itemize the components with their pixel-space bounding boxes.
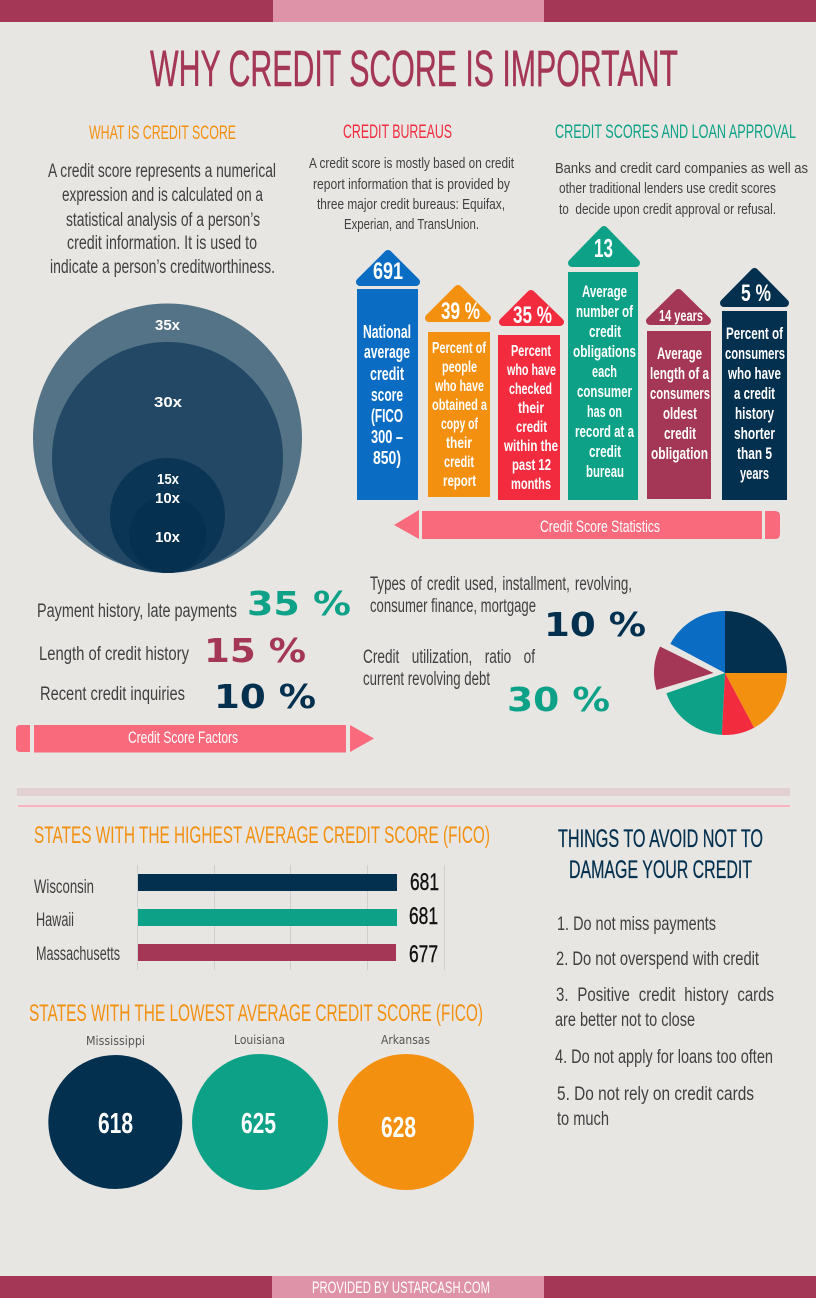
chart: nested circles: 10x xyxy=(155,529,181,546)
statistic: national average credit score: (FICO xyxy=(371,406,403,426)
statistic: credit history shorter than 5 years: shorter xyxy=(734,424,775,443)
statistic: obtained credit report: report xyxy=(443,473,476,490)
statistic: average credit obligations: each xyxy=(592,362,617,381)
statistic: length of oldest obligation: obligation xyxy=(651,444,708,463)
statistic: credit history shorter than 5 years: years xyxy=(740,464,769,483)
arrow banner: credit score factors: Credit Score Factors xyxy=(128,728,238,747)
factor: credit utilization: 30 % xyxy=(507,680,610,719)
statistic: national average credit score: score xyxy=(371,385,403,405)
bar chart: highest average credit scores: Wisconsin xyxy=(34,877,94,898)
statistic: length of oldest obligation: consumers xyxy=(650,384,710,403)
statistic: credit history shorter than 5 years: than 5 xyxy=(737,444,772,463)
statistic: national average credit score xyxy=(357,254,418,500)
circle stat: Mississippi: Mississippi xyxy=(86,1034,145,1048)
statistic: national average credit score: 300 – xyxy=(371,427,403,447)
statistic: checked credit: within the xyxy=(503,438,558,455)
factor: recent credit inquiries: Recent credit inquiries xyxy=(40,684,185,705)
statistic: obtained credit report xyxy=(428,289,490,497)
chart: nested circles: 35x xyxy=(155,317,181,334)
text block: credit score definition: indicate a person’s creditworthiness. xyxy=(50,257,275,278)
factor: types of credit used: consumer finance, mortgage xyxy=(370,596,536,617)
factor: recent credit inquiries: 10 % xyxy=(214,677,316,716)
factor: credit utilization xyxy=(363,647,610,719)
statistic: credit history shorter than 5 years: Percent of xyxy=(726,324,783,343)
statistic: average credit obligations: record at a xyxy=(575,422,634,441)
statistic: credit history shorter than 5 years: 5 % xyxy=(741,280,771,307)
statistic: credit history shorter than 5 years: history xyxy=(735,404,774,423)
circle stat: Mississippi xyxy=(48,1034,182,1189)
statistic: length of oldest obligation: credit xyxy=(664,424,696,443)
circle stat: Louisiana: 625 xyxy=(241,1108,276,1140)
statistic: credit history shorter than 5 years: who have xyxy=(727,364,781,383)
bar chart: highest average credit scores: Hawaii xyxy=(36,910,74,931)
statistic: average credit obligations: 13 xyxy=(594,233,613,263)
heading: what is credit score: WHAT IS CREDIT SCORE xyxy=(89,123,236,144)
statistic: average credit obligations xyxy=(568,230,638,500)
bar chart: highest average credit scores: 681 xyxy=(410,869,439,896)
statistic: obtained credit report: Percent of xyxy=(432,340,486,357)
footer banner xyxy=(0,1276,816,1298)
statistic: obtained credit report: who have xyxy=(434,378,484,395)
factor: payment history: 35 % xyxy=(247,584,351,623)
statistic: checked credit: credit xyxy=(516,419,547,436)
chart: nested circles xyxy=(33,304,302,573)
heading: lowest states: STATES WITH THE LOWEST AVERAGE CREDIT SCORE (FICO) xyxy=(29,1000,483,1027)
list: things to avoid xyxy=(555,914,774,1130)
factor: recent credit inquiries xyxy=(40,677,316,716)
factor: types of credit used: 10 % xyxy=(544,605,646,644)
statistic: length of oldest obligation: length of a xyxy=(650,364,709,383)
circle stat: Louisiana xyxy=(192,1033,328,1190)
statistic: length of oldest obligation: 14 years xyxy=(659,308,703,325)
statistic: national average credit score: 850) xyxy=(373,448,401,468)
statistic: average credit obligations: Average xyxy=(582,282,627,301)
list: things to avoid: 5. Do not rely on credit cards xyxy=(557,1084,754,1105)
text block: credit score definition: expression and is calculated on a xyxy=(62,185,263,206)
heading: credit bureaus: CREDIT BUREAUS xyxy=(343,122,452,143)
text block: credit bureaus: report information that is provided by xyxy=(313,176,510,193)
statistic: obtained credit report: people xyxy=(442,359,477,376)
text block: credit score definition: A credit score represents a numerical xyxy=(48,161,276,182)
top banner xyxy=(0,0,816,22)
statistic: obtained credit report: copy of xyxy=(441,416,478,433)
statistic: credit history shorter than 5 years xyxy=(722,272,787,500)
factor: credit utilization: Credit utilization, ratio of xyxy=(363,647,536,668)
text block: credit bureaus: A credit score is mostly based on credit xyxy=(309,155,515,172)
text block: credit score definition xyxy=(48,161,276,278)
statistic: national average credit score: National xyxy=(363,322,411,342)
statistic: national average credit score: credit xyxy=(370,364,404,384)
chart: nested circles: 10x xyxy=(155,490,181,507)
statistic: average credit obligations: credit xyxy=(589,322,621,341)
list: things to avoid: 2. Do not overspend with credit xyxy=(556,949,760,970)
factor: payment history xyxy=(37,584,351,623)
list: things to avoid: to much xyxy=(557,1109,609,1130)
text block: credit bureaus xyxy=(309,155,515,233)
heading: highest states: STATES WITH THE HIGHEST AVERAGE CREDIT SCORE (FICO) xyxy=(34,822,490,849)
statistic: checked credit: months xyxy=(511,476,551,493)
pie chart: credit score factors xyxy=(654,611,787,735)
statistic: obtained credit report: 39 % xyxy=(441,298,480,325)
statistic: average credit obligations: obligations xyxy=(573,342,636,361)
list: things to avoid: are better not to close xyxy=(555,1010,695,1031)
statistic: obtained credit report: their xyxy=(446,435,472,452)
circle stat: Arkansas: 628 xyxy=(381,1112,416,1144)
bar chart: highest average credit scores: 677 xyxy=(409,941,438,968)
statistic: obtained credit report: credit xyxy=(444,454,474,471)
bar chart: highest average credit scores xyxy=(34,865,444,970)
heading: things to avoid xyxy=(558,825,763,884)
chart: nested circles: 30x xyxy=(154,394,183,411)
circle stat: Louisiana: Louisiana xyxy=(234,1033,285,1047)
statistic: checked credit: 35 % xyxy=(513,302,552,329)
statistic: checked credit: checked xyxy=(509,381,552,398)
statistic: checked credit: who have xyxy=(506,362,556,379)
statistic: national average credit score: 691 xyxy=(373,258,403,285)
bar chart: highest average credit scores: 681 xyxy=(409,903,438,930)
statistic: average credit obligations: credit xyxy=(589,442,621,461)
statistic: average credit obligations: has on xyxy=(587,402,622,421)
statistic: checked credit: their xyxy=(518,400,544,417)
statistic: average credit obligations: bureau xyxy=(586,462,624,481)
text block: credit bureaus: Experian, and TransUnion. xyxy=(344,216,479,233)
chart: nested circles: 15x xyxy=(157,471,180,488)
circle stat: Arkansas xyxy=(338,1033,474,1190)
circle stat: Arkansas: Arkansas xyxy=(381,1033,430,1047)
factor: length of credit history: 15 % xyxy=(204,631,306,670)
text block: credit score definition: credit information. It is used to xyxy=(67,233,257,254)
factor: payment history: Payment history, late payments xyxy=(37,601,237,622)
footer banner: PROVIDED BY USTARCASH.COM xyxy=(312,1278,490,1297)
statistic: length of oldest obligation: oldest xyxy=(663,404,697,423)
circle stat: Mississippi: 618 xyxy=(98,1108,133,1140)
text block: loan approval xyxy=(555,160,808,218)
statistic: checked credit: past 12 xyxy=(512,457,551,474)
factor: types of credit used xyxy=(370,574,646,644)
arrow banner: credit score factors xyxy=(16,725,374,752)
statistic: length of oldest obligation: Average xyxy=(657,344,702,363)
arrow banner: credit score statistics: Credit Score Statistics xyxy=(540,517,660,536)
arrow banner: credit score statistics xyxy=(394,510,780,539)
statistic: obtained credit report: obtained a xyxy=(432,397,487,414)
factor: length of credit history xyxy=(39,631,306,670)
factor: credit utilization: current revolving debt xyxy=(363,669,490,690)
statistic: national average credit score: average xyxy=(364,342,410,362)
statistic: credit history shorter than 5 years: a credit xyxy=(734,384,775,403)
statistic: checked credit: Percent xyxy=(511,343,551,360)
statistic: average credit obligations: consumer xyxy=(577,382,632,401)
statistic: checked credit xyxy=(498,294,560,500)
text block: credit bureaus: three major credit bureaus: Equifax, xyxy=(317,196,505,213)
statistic: length of oldest obligation xyxy=(647,293,711,499)
text block: credit score definition: statistical analysis of a person’s xyxy=(66,210,260,231)
factor: length of credit history: Length of credit history xyxy=(39,644,189,665)
list: things to avoid: 1. Do not miss payments xyxy=(557,914,716,935)
statistic: average credit obligations: number of xyxy=(576,302,633,321)
factor: types of credit used: Types of credit used, installment, revolving, xyxy=(370,574,632,595)
statistic: credit history shorter than 5 years: consumers xyxy=(725,344,785,363)
bar chart: highest average credit scores: Massachusetts xyxy=(36,944,120,965)
